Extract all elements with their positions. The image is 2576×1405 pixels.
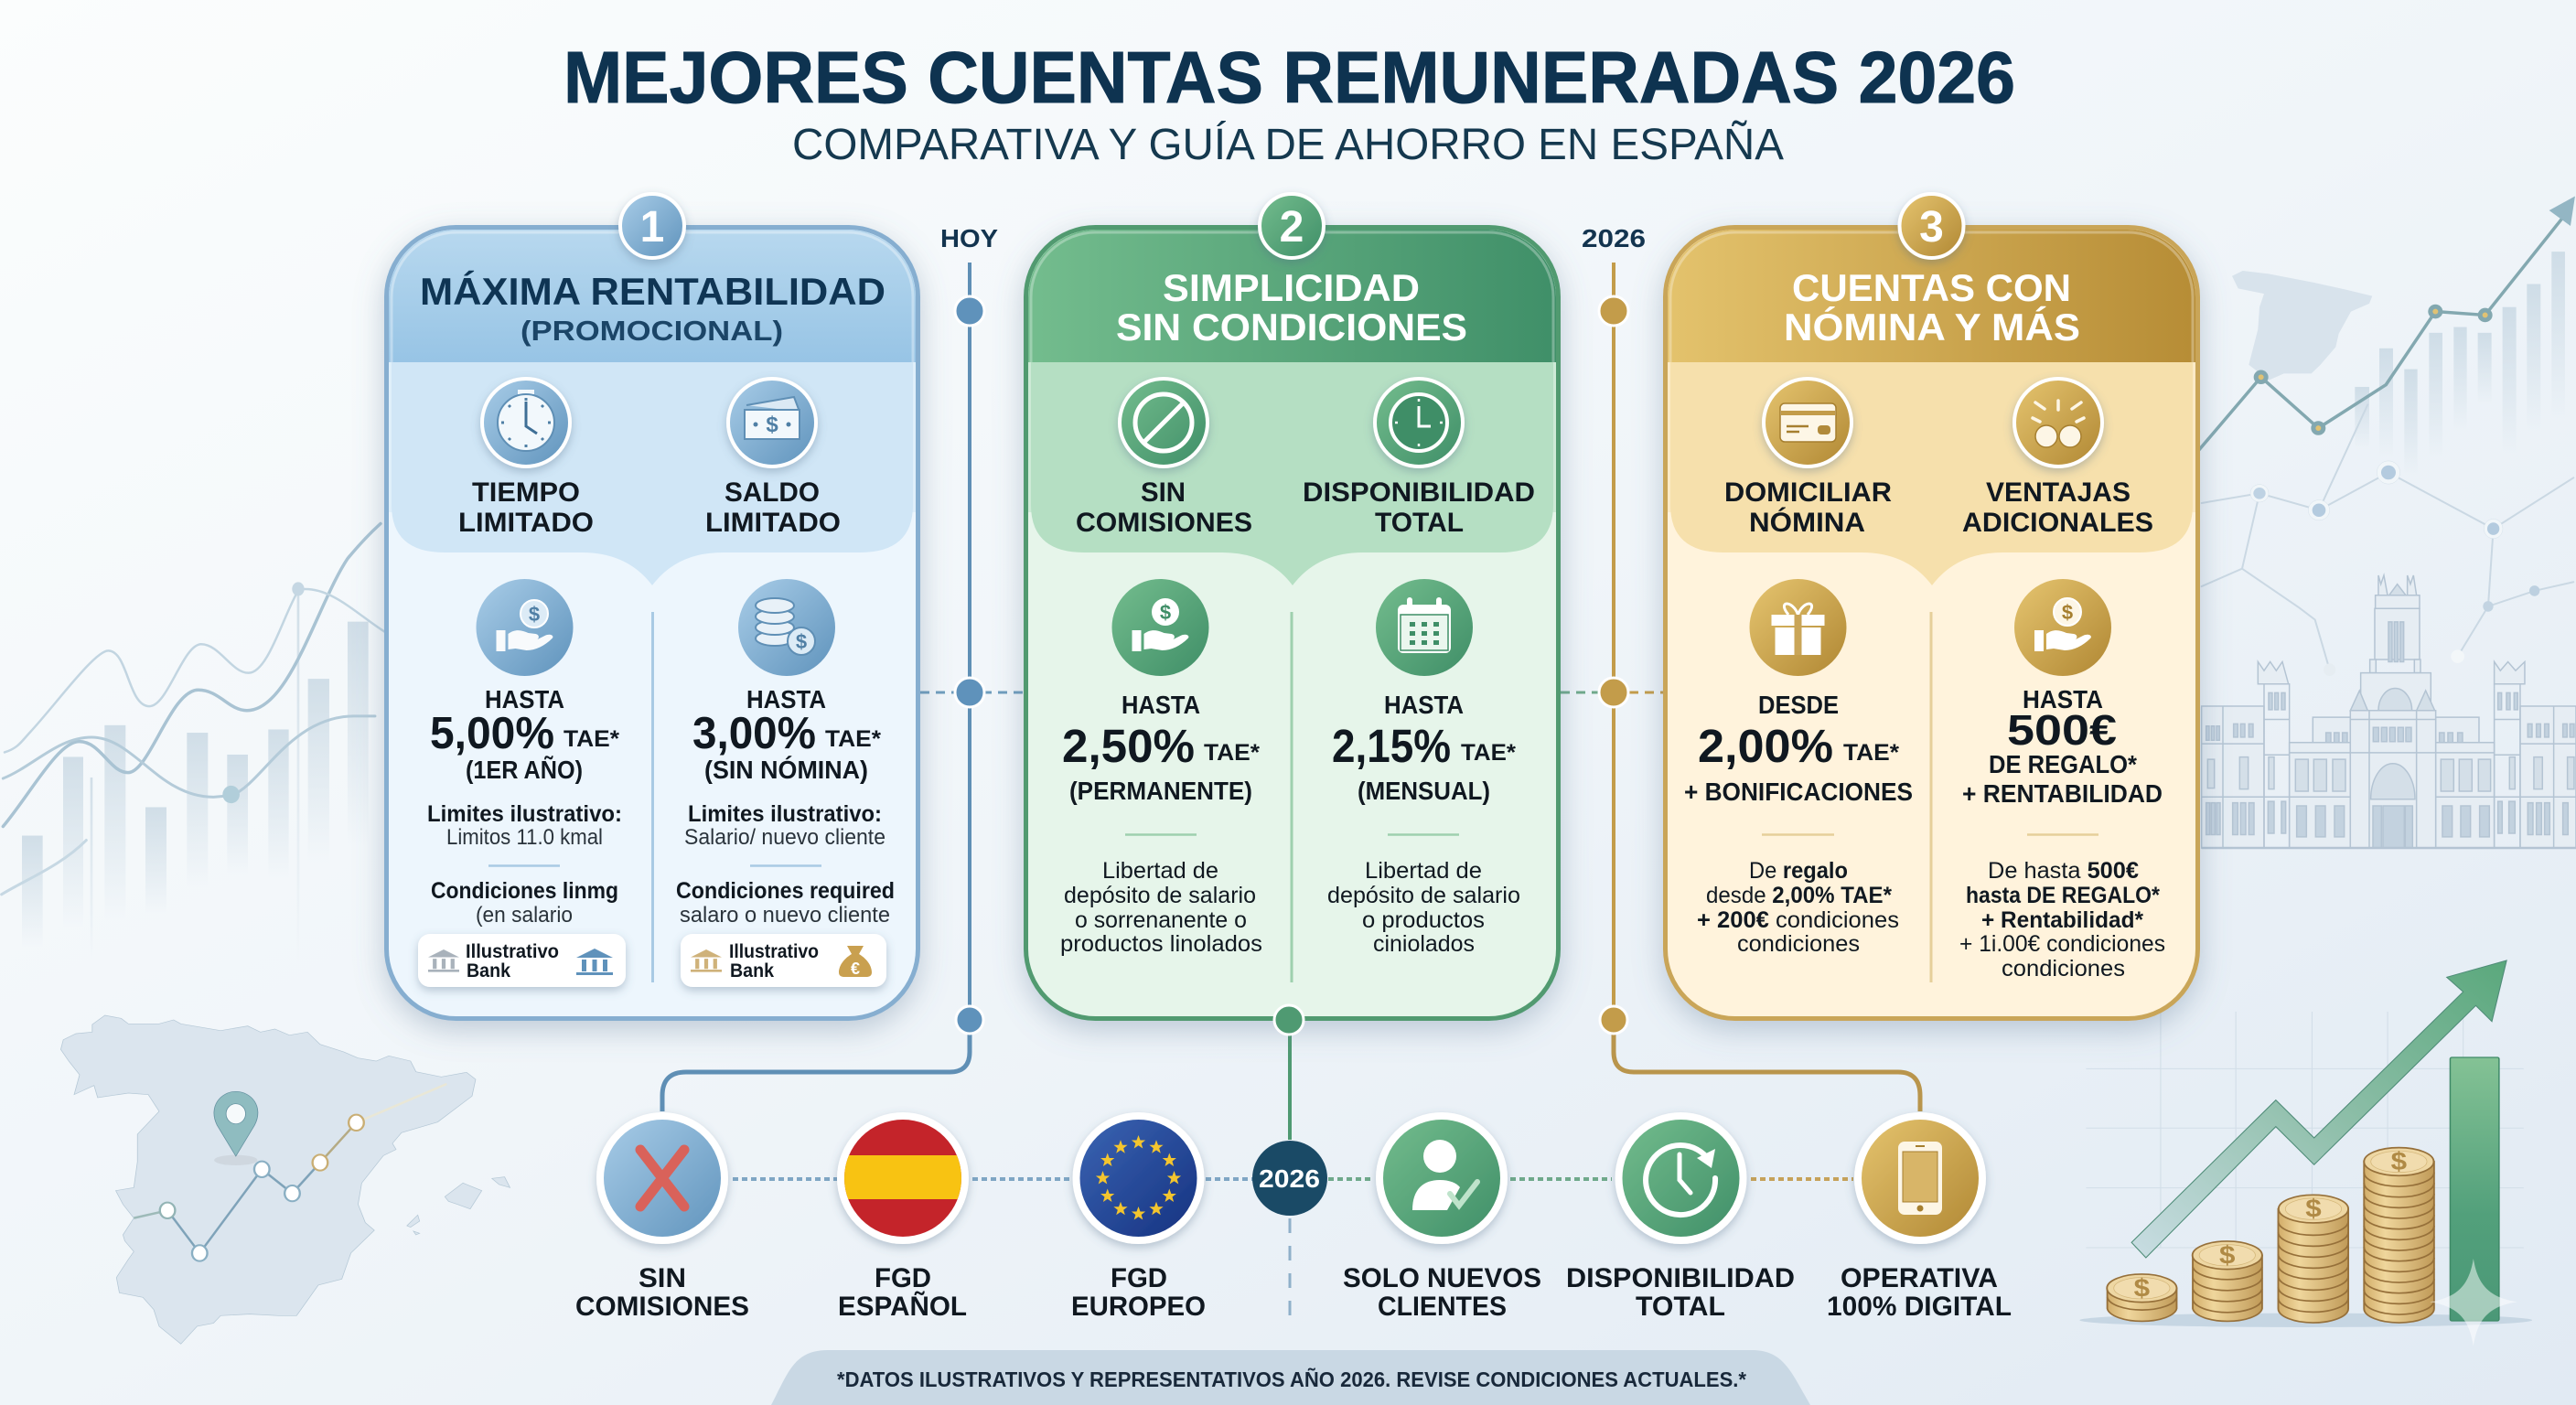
bank chip 2: Illustrativo	[729, 941, 819, 962]
rate column 1: (1ER AÑO)	[466, 756, 583, 784]
panel 2 header: SIMPLICIDAD	[1163, 266, 1420, 309]
rate column 6: 500€	[2007, 706, 2117, 754]
label: saldo limitado	[705, 477, 841, 538]
details column 1: Limites ilustrativo:	[427, 801, 622, 827]
icon: banknotes	[728, 379, 816, 467]
map of Spain with trend line	[60, 1015, 510, 1344]
decorative chart and network right	[2177, 197, 2575, 676]
badge 3	[1899, 194, 1963, 258]
label: sin comisiones: COMISIONES	[1076, 508, 1252, 538]
feature: sin comisiones: SIN	[639, 1263, 686, 1293]
details column 5: + 200€ condiciones	[1697, 907, 1899, 933]
panel 2 divider	[1290, 612, 1293, 982]
rate column 3: TAE*	[1204, 740, 1260, 766]
label: tiempo limitado: TIEMPO	[472, 477, 580, 508]
growth chart with coins and arrow: $	[2219, 1241, 2236, 1270]
panel 1 header: (PROMOCIONAL)	[521, 315, 783, 347]
title: MEJORES CUENTAS REMUNERADAS 2026	[564, 37, 2015, 118]
rate column 5: TAE*	[1843, 740, 1899, 766]
badge 2: 2	[1280, 203, 1304, 252]
rate column 1: TAE*	[564, 726, 619, 752]
rate column 6: DE REGALO*	[1989, 750, 2137, 778]
icon: calendar	[1376, 579, 1473, 676]
connectors to bottom row	[662, 1006, 1920, 1317]
details column 5: desde 2,00% TAE*	[1706, 883, 1892, 908]
icon: prohibited	[1120, 379, 1208, 467]
rate column 4: TAE*	[1461, 740, 1516, 766]
panel 1: máxima rentabilidad	[384, 194, 920, 1019]
details column 5: condiciones	[1737, 931, 1860, 957]
rate column 2	[692, 685, 881, 784]
badge 1	[620, 194, 684, 258]
rate column 4: (MENSUAL)	[1358, 777, 1490, 805]
panel 1 divider	[651, 612, 654, 982]
label: saldo limitado: LIMITADO	[705, 508, 841, 538]
details column 6: + 1i.00€ condiciones	[1959, 931, 2165, 957]
badge 2	[1260, 194, 1324, 258]
rate column 6: + RENTABILIDAD	[1962, 779, 2163, 808]
bank chip 1: Bank	[467, 960, 510, 981]
details column 2: Condiciones required	[676, 878, 895, 904]
panel 3 divider	[1930, 612, 1932, 982]
panel 2: simplicidad sin condiciones	[1024, 194, 1561, 1035]
details column 1: (en salario	[476, 903, 573, 928]
bank chip 2	[681, 934, 886, 987]
bank chip 2: €	[851, 960, 860, 978]
details column 2	[676, 801, 895, 928]
details column 3	[1060, 834, 1262, 957]
label: ventajas adicionales: VENTAJAS	[1986, 477, 2131, 508]
icon: banknotes: $	[766, 413, 778, 437]
rate column 2: HASTA	[746, 685, 826, 713]
feature: operativa digital: OPERATIVA	[1841, 1263, 1998, 1293]
label: sin comisiones: SIN	[1141, 477, 1186, 508]
feature: disponibilidad total	[1566, 1116, 1795, 1322]
label: disponibilidad total	[1303, 477, 1535, 538]
rate column 2: 3,00%	[692, 709, 816, 758]
rate column 6	[1962, 685, 2163, 808]
bank chip 1	[418, 934, 626, 987]
decorative building: Palacio de Cibeles	[2202, 575, 2576, 848]
feature: fgd español: FGD	[875, 1263, 931, 1293]
timeline left: HOY	[940, 224, 998, 252]
rate column 5	[1684, 691, 1913, 806]
details column 3: o sorrenanente o	[1075, 907, 1247, 933]
feature: fgd español: ESPAÑOL	[838, 1291, 967, 1322]
details column 6: + Rentabilidad*	[1981, 907, 2143, 933]
details column 4: Libertad de	[1365, 858, 1482, 884]
details column 2: Limites ilustrativo:	[688, 801, 882, 827]
icon: hand with coin green: $	[1160, 601, 1171, 624]
growth chart with coins and arrow: $	[2391, 1147, 2408, 1176]
details column 4: ciniolados	[1373, 931, 1475, 957]
feature: operativa digital	[1827, 1116, 2012, 1322]
rate column 5: 2,00%	[1698, 720, 1833, 772]
details column 4: depósito de salario	[1327, 883, 1520, 908]
timeline right	[1561, 224, 1663, 1020]
feature: sin comisiones	[575, 1116, 749, 1322]
icon: hand with coin: $	[529, 603, 540, 626]
panel 1 header	[384, 225, 920, 585]
feature: fgd europeo	[1071, 1116, 1206, 1322]
icon: hand with coin green	[1112, 579, 1209, 676]
rate column 3: (PERMANENTE)	[1069, 777, 1252, 805]
rate column 3	[1062, 691, 1260, 805]
details column 3: Libertad de	[1102, 858, 1218, 884]
details column 1: Condiciones linmg	[431, 878, 618, 904]
details column 1: Limitos 11.0 kmal	[446, 825, 603, 850]
label: disponibilidad total: TOTAL	[1375, 508, 1464, 538]
growth chart with coins and arrow	[2079, 960, 2532, 1346]
icon: bank card	[1764, 379, 1852, 467]
details column 6: De hasta 500€	[1988, 858, 2139, 884]
disclaimer	[771, 1350, 1810, 1405]
rate column 1	[430, 685, 619, 784]
feature: solo nuevos clientes: CLIENTES	[1378, 1292, 1507, 1322]
rate column 4	[1332, 691, 1516, 805]
badge 3: 3	[1919, 203, 1944, 252]
icon: clock	[1375, 379, 1463, 467]
feature: solo nuevos clientes	[1343, 1116, 1541, 1322]
rate column 5: DESDE	[1758, 691, 1839, 719]
label: tiempo limitado: LIMITADO	[458, 508, 594, 538]
icon: hand with coin	[476, 579, 573, 676]
feature: operativa digital: 100% DIGITAL	[1827, 1292, 2012, 1322]
growth chart with coins and arrow: $	[2305, 1195, 2322, 1223]
icon: coins database	[738, 579, 835, 676]
label: ventajas adicionales	[1962, 477, 2153, 538]
panel 1 header: MÁXIMA RENTABILIDAD	[420, 270, 886, 313]
growth chart with coins and arrow: $	[2134, 1274, 2151, 1303]
subtitle: COMPARATIVA Y GUÍA DE AHORRO EN ESPAÑA	[792, 120, 1784, 169]
icon: hand with coin gold	[2014, 579, 2111, 676]
feature: disponibilidad total: TOTAL	[1636, 1292, 1725, 1322]
label: tiempo limitado	[458, 477, 594, 538]
feature: fgd europeo: FGD	[1111, 1263, 1167, 1293]
label: domiciliar nómina: NÓMINA	[1749, 507, 1865, 538]
label: disponibilidad total: DISPONIBILIDAD	[1303, 477, 1535, 508]
icon: advantages coins and pins	[2014, 379, 2102, 467]
timeline right: 2026	[1582, 224, 1646, 252]
decorative chart left	[2, 523, 384, 967]
icon: stopwatch	[482, 379, 570, 467]
feature: solo nuevos clientes: SOLO NUEVOS	[1343, 1263, 1541, 1293]
timeline left	[920, 224, 1024, 1020]
panel 3 header	[1663, 225, 2200, 585]
rate column 1: 5,00%	[430, 709, 554, 758]
rate column 6: HASTA	[2023, 685, 2103, 713]
disclaimer: *DATOS ILUSTRATIVOS Y REPRESENTATIVOS AÑO 2026. REVISE CONDICIONES ACTUALES.*	[837, 1367, 1746, 1391]
details column 3: depósito de salario	[1064, 883, 1256, 908]
rate column 5: + BONIFICACIONES	[1684, 778, 1913, 806]
feature: disponibilidad total: DISPONIBILIDAD	[1566, 1263, 1795, 1293]
feature: fgd español	[838, 1116, 967, 1322]
details column 2: Salario/ nuevo cliente	[684, 825, 886, 850]
bank chip 1: Illustrativo	[466, 941, 559, 962]
label: domiciliar nómina	[1724, 477, 1892, 538]
details column 6: hasta DE REGALO*	[1966, 883, 2160, 908]
details column 4	[1327, 834, 1520, 957]
details column 6: condiciones	[2002, 956, 2125, 981]
badge 1: 1	[640, 203, 664, 252]
rate column 4: 2,15%	[1332, 720, 1451, 772]
details column 1	[427, 801, 622, 928]
panel 2 header: SIN CONDICIONES	[1116, 306, 1467, 349]
label: saldo limitado: SALDO	[724, 477, 820, 508]
rate column 2: (SIN NÓMINA)	[704, 756, 868, 784]
panel 2 header	[1024, 225, 1561, 585]
panel 3 header: CUENTAS CON	[1792, 266, 2071, 309]
rate column 3: 2,50%	[1062, 720, 1195, 772]
panel 3: cuentas con nómina	[1663, 194, 2200, 1019]
panel 3 header: NÓMINA Y MÁS	[1784, 305, 2080, 349]
label: sin comisiones	[1076, 477, 1252, 538]
rate column 1: HASTA	[485, 685, 564, 713]
details column 6	[1959, 834, 2165, 981]
bank chip 2: Bank	[730, 960, 774, 981]
details column 3: productos linolados	[1060, 931, 1262, 957]
details column 5	[1697, 834, 1899, 957]
label: domiciliar nómina: DOMICILIAR	[1724, 477, 1892, 508]
details column 2: salaro o nuevo cliente	[680, 903, 890, 928]
feature: fgd europeo: EUROPEO	[1071, 1292, 1206, 1322]
badge: 2026: 2026	[1259, 1164, 1320, 1193]
icon: hand with coin gold: $	[2062, 601, 2073, 624]
icon: coins database: $	[796, 630, 807, 653]
details column 4: o productos	[1362, 907, 1485, 933]
rate column 4: HASTA	[1384, 691, 1464, 719]
rate column 3: HASTA	[1122, 691, 1200, 719]
icon: gift	[1749, 579, 1846, 676]
label: ventajas adicionales: ADICIONALES	[1962, 508, 2153, 538]
node 2	[1274, 1005, 1304, 1035]
feature: sin comisiones: COMISIONES	[575, 1292, 749, 1322]
badge: 2026	[1252, 1141, 1327, 1216]
rate column 2: TAE*	[825, 726, 881, 752]
details column 5: De regalo	[1749, 858, 1848, 884]
